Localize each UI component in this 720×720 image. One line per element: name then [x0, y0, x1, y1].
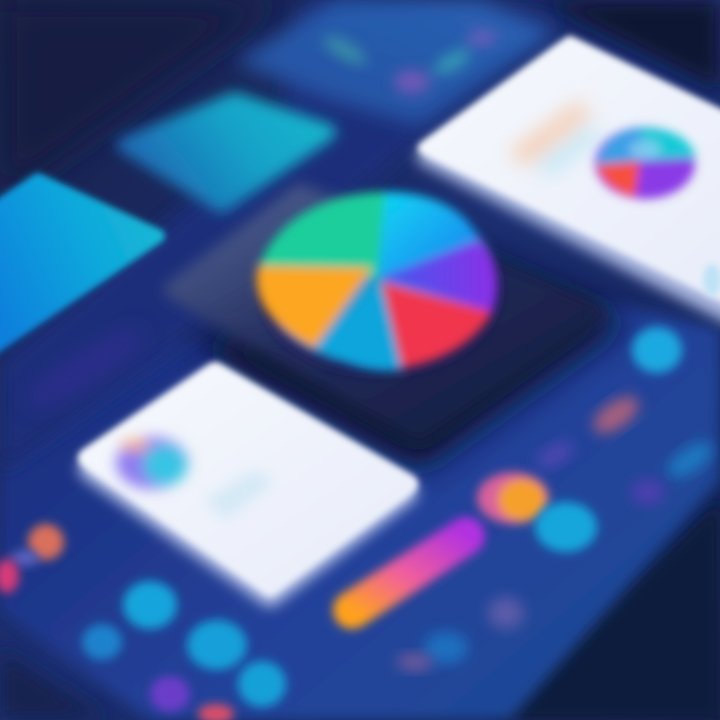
icons: left side blobs	[0, 524, 286, 720]
platform: upper blue surface	[0, 0, 560, 470]
pie base	[260, 194, 496, 366]
icon: orange magenta blob	[477, 472, 549, 524]
slice: purple	[378, 240, 497, 312]
pie shadow edge	[260, 206, 500, 374]
chart: small pie	[595, 127, 696, 199]
panel: teal card	[125, 100, 328, 205]
icon: pink dot	[198, 704, 234, 720]
bar: gradient pill	[352, 536, 466, 610]
slice: blue teal	[316, 282, 402, 371]
mini chart marks	[320, 31, 497, 94]
icon: purple dot	[631, 479, 665, 505]
panel: cyan card left	[0, 180, 158, 350]
platform: main blue surface	[0, 300, 720, 720]
panel: dark center card	[172, 192, 598, 436]
icon: orange mauve dash	[587, 389, 645, 441]
icon: blue dash	[662, 435, 718, 485]
icon: teal dot	[187, 620, 247, 670]
slice: red	[382, 282, 492, 368]
icon: pink dot	[0, 559, 19, 593]
text lines blur	[510, 102, 602, 176]
icon: faint dot	[488, 597, 524, 629]
chart: small donut	[116, 437, 188, 489]
icon: blue dot	[82, 624, 122, 660]
panel: dark left band	[17, 317, 153, 419]
icon: mauve dash	[397, 653, 433, 671]
icon: orange dot	[28, 524, 64, 560]
panel: top blue chart	[235, 0, 555, 125]
panel: white card lower	[88, 372, 408, 597]
icon: teal dot lower	[238, 661, 286, 707]
slice: cyan blue	[378, 192, 480, 278]
icon: cyan dot top right	[632, 327, 682, 373]
shadow: under center panel	[200, 240, 630, 470]
icon: purple dash	[533, 436, 577, 474]
icon: cyan dot	[123, 581, 177, 629]
icon: cyan blob	[535, 502, 597, 552]
slice: green	[258, 192, 385, 278]
chart: large pie	[256, 192, 500, 374]
text lines blur	[205, 470, 275, 520]
icon: faint blue	[424, 632, 468, 664]
icon: purple dot	[150, 676, 190, 712]
icon: blue link	[11, 550, 39, 566]
icons: right side blobs	[397, 327, 718, 671]
panel: white card top right	[423, 43, 720, 317]
slice: orange	[256, 266, 372, 348]
